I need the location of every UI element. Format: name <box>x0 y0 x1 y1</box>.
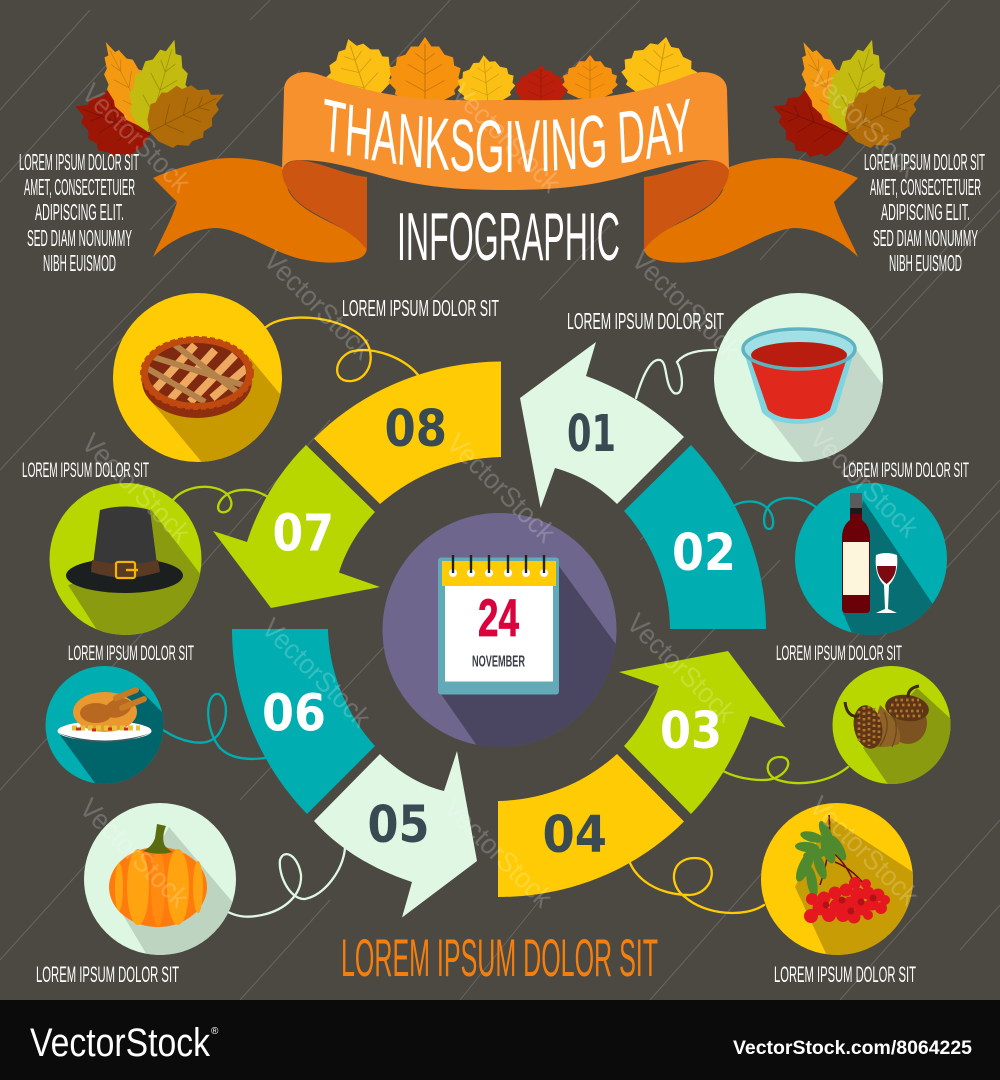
watermarks <box>74 62 925 914</box>
label: pie: LOREM IPSUM DOLOR SIT <box>342 295 499 321</box>
icon: pie <box>113 293 282 462</box>
icon: cranberry sauce bowl <box>714 293 883 462</box>
calendar: NOVEMBER <box>472 654 525 670</box>
title ribbon <box>153 72 858 263</box>
watermarks: VectorStock <box>74 792 195 914</box>
label: cranberry: LOREM IPSUM DOLOR SIT <box>567 308 724 334</box>
watermarks: VectorStock <box>446 77 567 199</box>
watermarks: VectorStock <box>441 427 562 549</box>
left text block: ADIPISCING ELIT. <box>35 199 124 225</box>
icon: rowan berries <box>761 803 913 955</box>
title: Thanksgiving Day <box>324 98 690 172</box>
arrow 03 <box>619 651 786 814</box>
arrow 04: 04 <box>542 806 607 865</box>
left leaf bouquet <box>63 32 238 167</box>
connector lines <box>163 318 848 917</box>
watermarks: VectorStock <box>76 427 197 549</box>
watermarks: VectorStock <box>804 790 925 912</box>
watermarks: VectorStock <box>258 244 379 366</box>
icon: acorns <box>832 666 950 784</box>
center circle with calendar <box>382 513 625 750</box>
right text block <box>864 149 985 276</box>
watermarks: VectorStock <box>438 792 559 914</box>
text: SED DIAM NONUMMY <box>27 225 132 251</box>
watermarks: VectorStock <box>804 422 925 544</box>
title: Thanksgiving Day: THANKSGIVING DAY <box>324 98 690 172</box>
icon: roast turkey <box>46 666 170 790</box>
text: LOREM IPSUM DOLOR SIT <box>22 459 149 482</box>
text: LOREM IPSUM DOLOR SIT <box>68 642 194 665</box>
arrow 06: 06 <box>262 684 326 744</box>
left text block <box>19 149 139 276</box>
arrow 04 <box>498 754 684 897</box>
calendar <box>438 555 559 694</box>
calendar: 24 <box>478 589 519 648</box>
footer bar: ® <box>211 1026 219 1037</box>
left text block: NIBH EUISMOD <box>43 250 116 276</box>
top leaves behind ribbon <box>316 29 704 111</box>
label: pumpkin: LOREM IPSUM DOLOR SIT <box>36 962 179 987</box>
arrow 01 <box>520 342 684 508</box>
arrow 03: 03 <box>660 702 722 761</box>
arrow 07: 07 <box>272 505 334 564</box>
text: LOREM IPSUM DOLOR SIT <box>341 929 658 988</box>
arrow 01: 01 <box>567 405 616 464</box>
watermarks: VectorStock <box>256 612 377 734</box>
watermarks: VectorStock <box>76 77 197 199</box>
arrow 07 <box>213 445 380 608</box>
icon: pilgrim hat <box>50 483 202 635</box>
watermarks: VectorStock <box>621 607 742 729</box>
arrow 02 <box>624 445 766 629</box>
arrow 05: 05 <box>368 796 430 855</box>
icon: wine bottle and glass <box>795 483 947 635</box>
footer bar: VectorStock.com/8064225 <box>733 1038 972 1059</box>
arrow 02: 02 <box>672 524 736 583</box>
arrow 06 <box>232 629 375 814</box>
watermarks: VectorStock <box>804 62 925 184</box>
icon: pumpkin <box>84 803 240 960</box>
watermarks: VectorStock <box>626 244 747 366</box>
arrow 05 <box>314 751 477 918</box>
text: INFOGRAPHIC <box>397 199 620 275</box>
arrow 08: 08 <box>384 400 447 459</box>
text: LOREM IPSUM DOLOR SIT <box>19 149 139 175</box>
arrow 08 <box>314 362 501 504</box>
right leaf bouquet <box>761 32 935 167</box>
footer bar: VectorStock <box>30 1021 211 1065</box>
footer bar <box>0 1000 1000 1080</box>
text: AMET, CONSECTETUIER <box>24 174 135 200</box>
